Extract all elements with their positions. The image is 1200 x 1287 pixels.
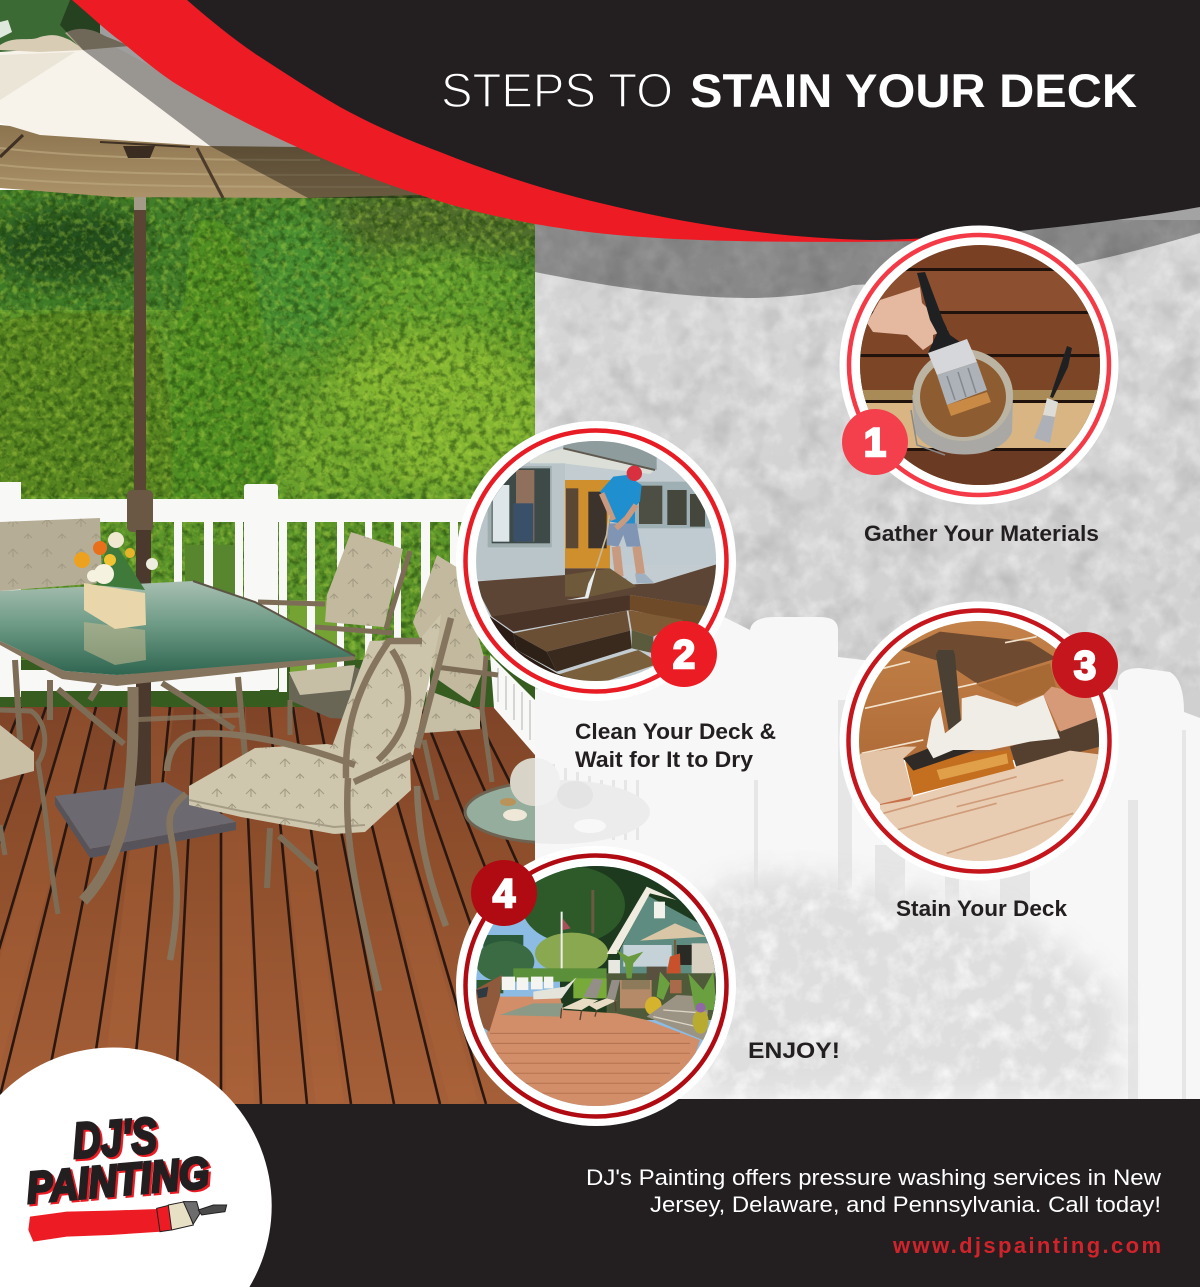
footer bar [0, 1099, 1200, 1287]
deck floor planks [0, 704, 535, 1104]
header black shape [187, 0, 1200, 240]
front chair [167, 614, 451, 991]
logo wordmark [25, 1107, 213, 1215]
top-left foliage [0, 0, 100, 55]
faded side table [535, 760, 650, 844]
step 2 circle [456, 421, 736, 701]
badge 1 [842, 409, 908, 475]
side table with ornaments [464, 758, 535, 844]
back chairs [258, 532, 498, 800]
photo: gloved hand staining wood [859, 621, 1099, 861]
brush block [903, 748, 1015, 795]
paint can [911, 349, 1013, 455]
logo wordmark: DJ'S [71, 1107, 159, 1169]
glass table top [0, 581, 355, 686]
planter with flowers [74, 532, 158, 629]
badge 3: 3 [1074, 644, 1096, 688]
white railing [0, 482, 480, 697]
glove [927, 695, 1060, 758]
handle [936, 650, 961, 733]
header translucent band over umbrella [60, 0, 430, 198]
footer message: DJ's Painting offers pressure washing services in New [586, 1165, 1161, 1190]
label: clean your deck: Clean Your Deck & [575, 719, 776, 744]
badge 2: 2 [673, 633, 695, 677]
title: STEPS TO [441, 65, 673, 118]
label: clean your deck [575, 719, 776, 772]
loungers [502, 977, 620, 1020]
header red swoosh [72, 0, 1000, 242]
badge 2 [651, 621, 717, 687]
badge 3 [1052, 632, 1118, 698]
title: STAIN YOUR DECK [690, 64, 1137, 117]
label: enjoy: ENJOY! [748, 1038, 840, 1063]
photo: brush and stain can on deck [855, 240, 1105, 496]
footer message: Jersey, Delaware, and Pennsylvania. Call today! [650, 1192, 1161, 1217]
umbrella canopy [0, 29, 420, 198]
hand [867, 287, 948, 350]
badge 1: 1 [864, 421, 886, 465]
umbrella pole [127, 197, 153, 786]
photo: man pressure washing deck [476, 441, 716, 681]
label: stain your deck: Stain Your Deck [896, 896, 1068, 921]
step 4 circle [456, 846, 736, 1126]
logo wordmark: PAINTING [27, 1150, 213, 1215]
footer message [586, 1165, 1161, 1217]
white fence [535, 615, 1200, 1099]
badge 4 [471, 860, 537, 926]
footer website: www.djspainting.com [892, 1233, 1161, 1258]
arm [1043, 687, 1100, 732]
title [441, 64, 1137, 118]
side railing on the right [490, 655, 535, 755]
water wand and spray [597, 515, 609, 567]
left cut-off chair [0, 710, 58, 914]
badge 4: 4 [493, 872, 516, 916]
house [607, 887, 717, 980]
label: clean your deck: Wait for It to Dry [575, 747, 754, 772]
planter wall and plants [607, 950, 720, 1042]
label: gather your materials: Gather Your Materials [864, 521, 1099, 546]
logo circle [0, 1047, 272, 1287]
faded flowers [702, 866, 1126, 1099]
deck and steps [473, 563, 720, 687]
photo: patio deck with table and umbrella [0, 0, 535, 1104]
deck floor [487, 997, 700, 1110]
step 3 circle [840, 602, 1118, 880]
panel: right faded backdrop [466, 220, 1200, 1100]
back bench cushion [0, 518, 102, 591]
large brush [917, 272, 991, 416]
header translucent band over panel [535, 190, 1200, 298]
icon: red paint stroke and brush [28, 1202, 227, 1242]
trees background [0, 185, 570, 720]
table base and legs [15, 660, 245, 901]
logo wordmark: DJ'S [73, 1109, 161, 1171]
step 1 circle [840, 226, 1118, 504]
logo wordmark: PAINTING [25, 1148, 211, 1213]
small brush [1034, 346, 1072, 443]
man [600, 466, 654, 586]
photo: finished deck and house [476, 866, 716, 1106]
